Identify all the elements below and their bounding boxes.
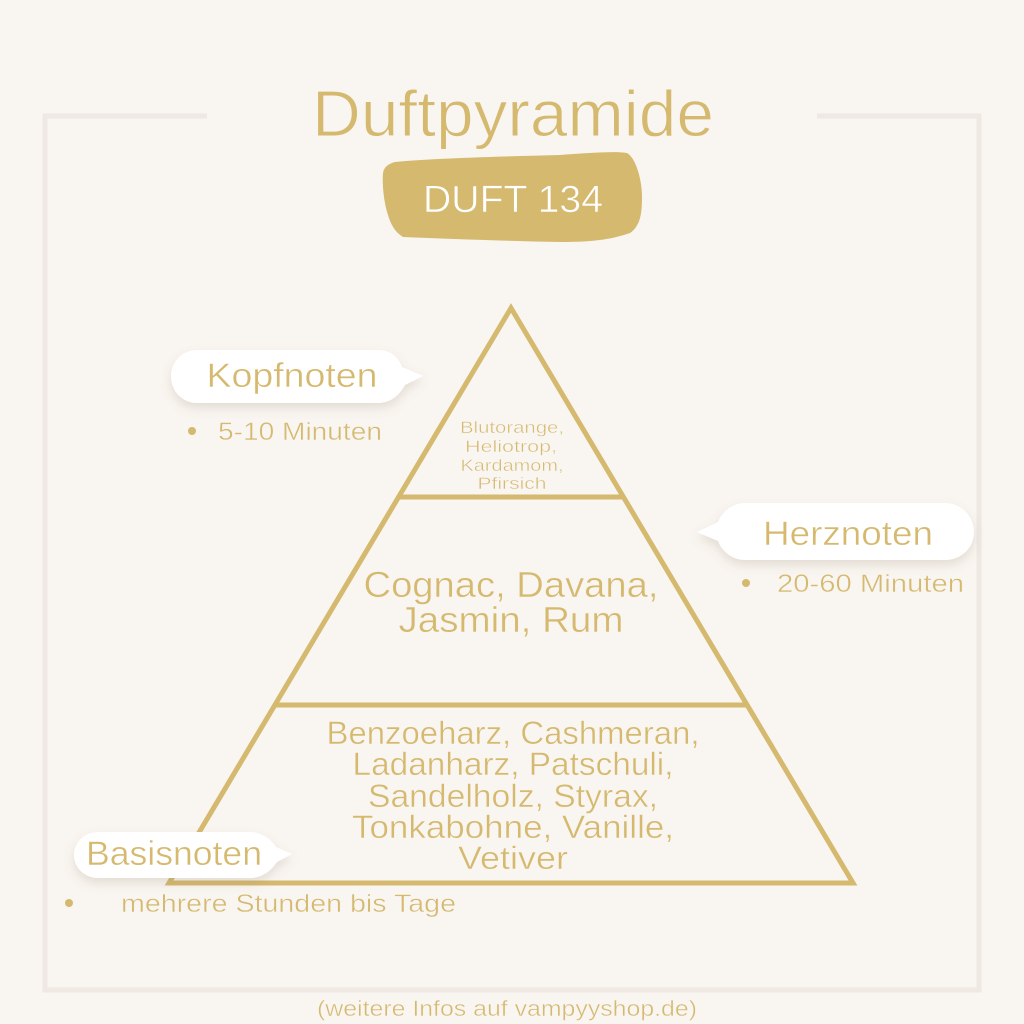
heart notes ingredients: Jasmin, Rum (398, 599, 624, 640)
duration: Basisnoten: mehrere Stunden bis Tage (121, 890, 456, 918)
base notes ingredients: Sandelholz, Styrax, (368, 778, 658, 814)
callout: Kopfnoten: Kopfnoten (206, 357, 378, 395)
base notes ingredients: Ladanharz, Patschuli, (352, 746, 674, 782)
callout: Basisnoten (74, 832, 292, 878)
top notes ingredients (460, 418, 564, 493)
base notes ingredients (326, 715, 700, 876)
heart notes ingredients (364, 564, 658, 640)
base notes ingredients: Vetiver (458, 840, 568, 876)
top notes ingredients: Kardamom, (460, 456, 564, 475)
callout: Herznoten (697, 503, 974, 560)
heart notes ingredients: Cognac, Davana, (364, 564, 658, 605)
pyramid outline (169, 308, 853, 883)
top notes ingredients: Pfirsich (478, 474, 546, 493)
title: Duftpyramide (312, 77, 714, 150)
callout: Basisnoten: Basisnoten (86, 835, 262, 873)
base notes ingredients: Benzoeharz, Cashmeran, (326, 715, 700, 751)
callout: Kopfnoten (171, 350, 423, 403)
duration: Herznoten: 20-60 Minuten (777, 570, 964, 598)
top notes ingredients: Heliotrop, (465, 437, 557, 456)
duration: Kopfnoten: 5-10 Minuten (218, 418, 382, 446)
badge: DUFT 134: DUFT 134 (423, 179, 603, 221)
footer note: (weitere Infos auf vampyyshop.de) (317, 996, 697, 1021)
callout: Herznoten: Herznoten (763, 515, 933, 553)
base notes ingredients: Tonkabohne, Vanille, (352, 809, 674, 845)
top notes ingredients: Blutorange, (460, 418, 564, 437)
badge: DUFT 134 (383, 152, 642, 242)
